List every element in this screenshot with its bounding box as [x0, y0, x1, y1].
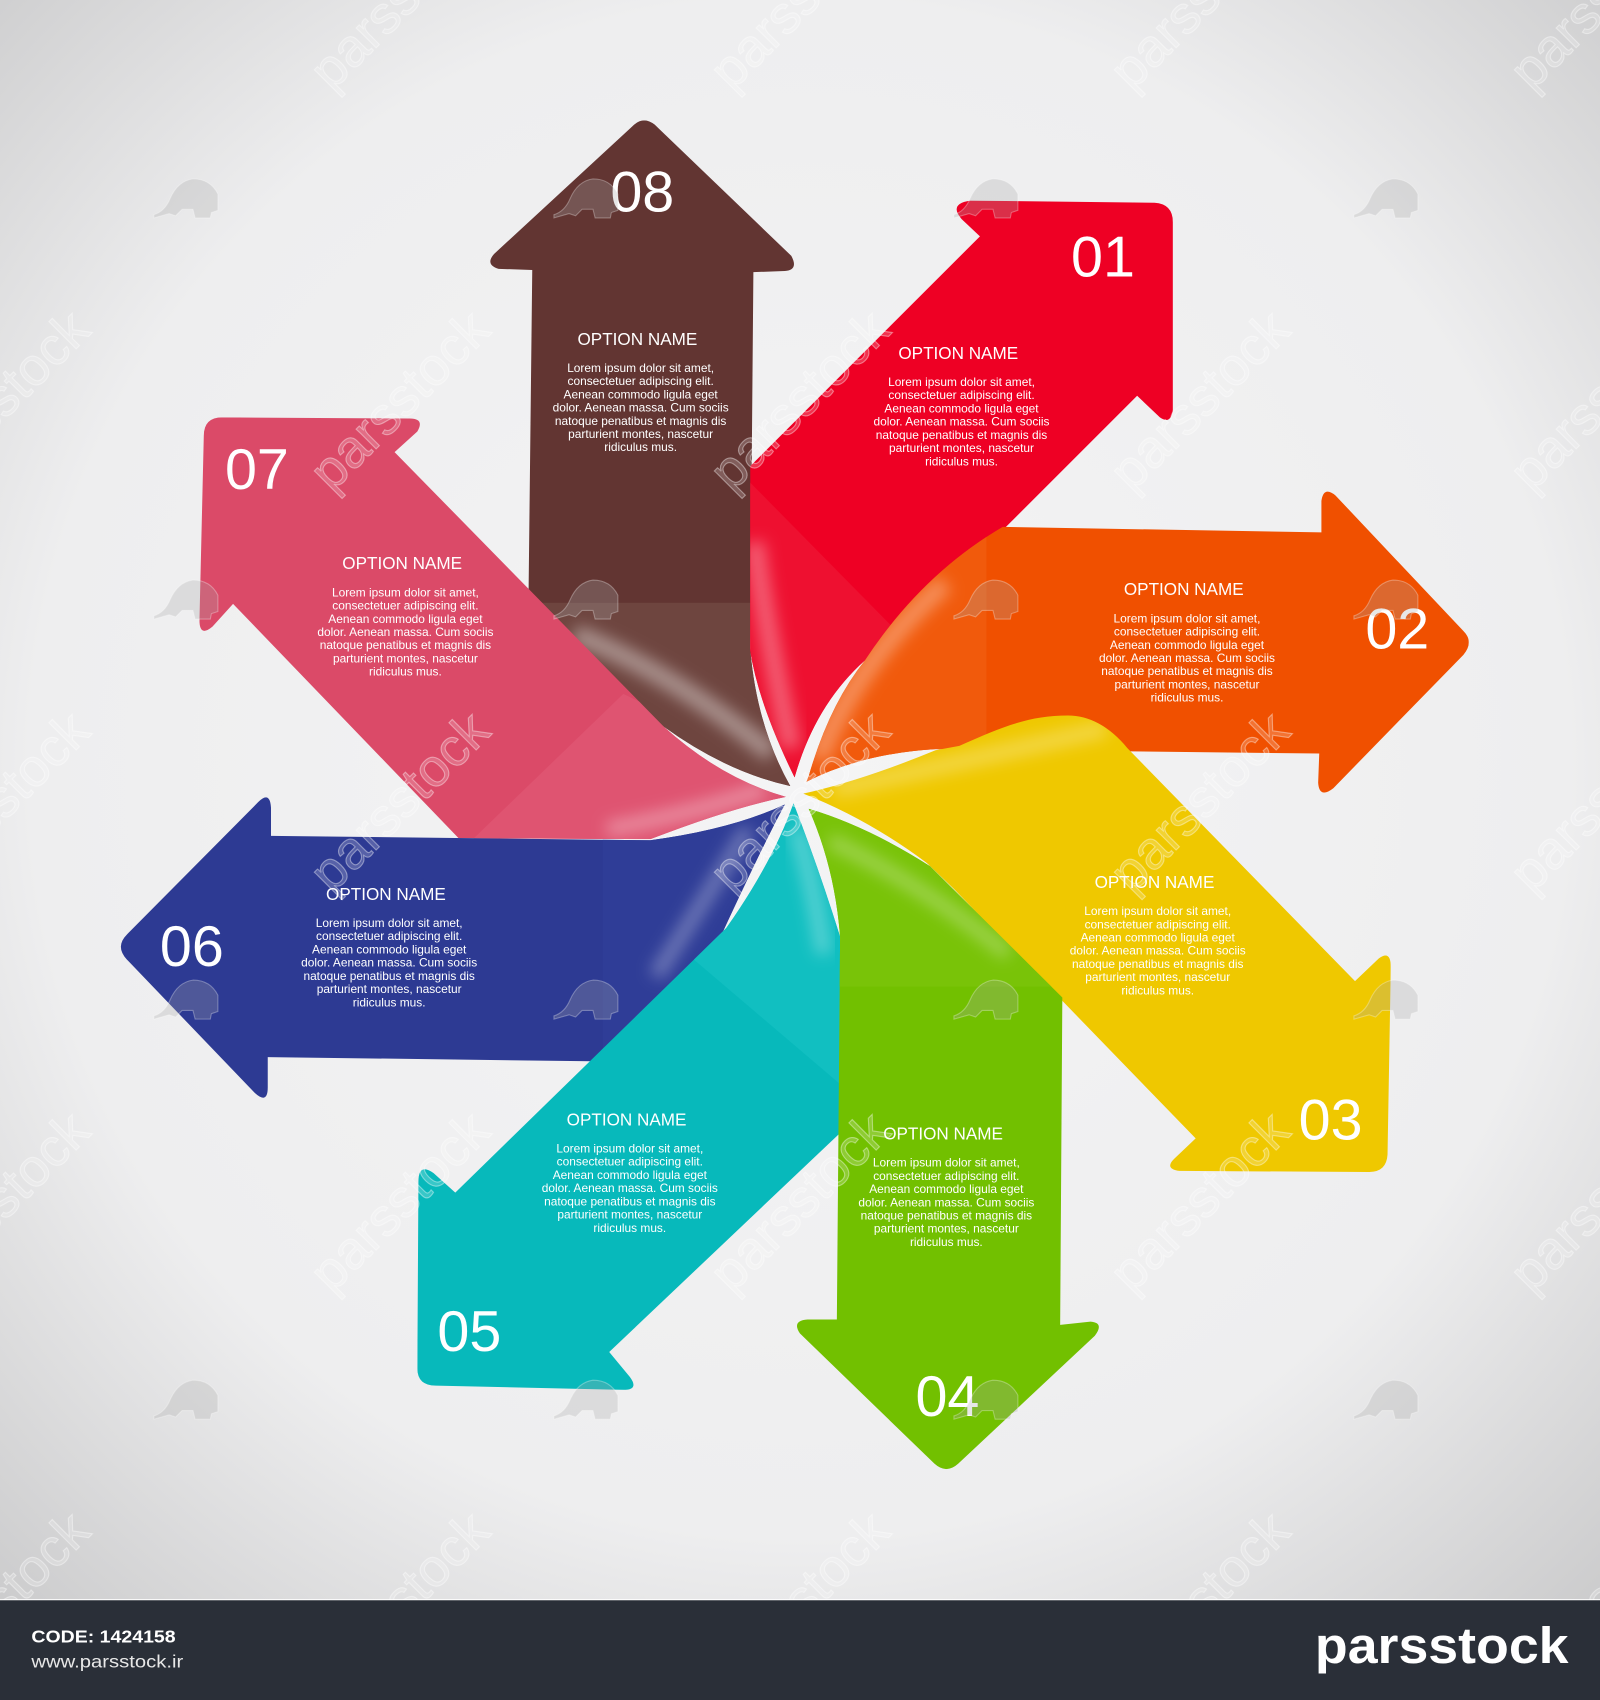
- arrow 05: teal: [407, 791, 856, 1399]
- footer bar: [0, 1599, 1600, 1700]
- text block 07: natoque penatibus et magnis dis: [320, 638, 491, 652]
- text block 03: OPTION NAME: [1095, 873, 1214, 892]
- number 08: 08: [610, 160, 674, 224]
- text block 07: dolor. Aenean massa. Cum sociis: [317, 625, 493, 639]
- text block 04: ridiculus mus.: [910, 1235, 983, 1249]
- footer url: www.parsstock.ir: [30, 1651, 183, 1671]
- text block 07: [317, 554, 493, 679]
- text block 02: parturient montes, nascetur: [1115, 677, 1259, 691]
- text block 05: ridiculus mus.: [593, 1221, 666, 1235]
- watermark overlay: parsstock: [698, 299, 901, 502]
- text block 05: Aenean commodo ligula eget: [553, 1168, 708, 1182]
- text block 01: natoque penatibus et magnis dis: [876, 428, 1047, 442]
- text block 04: Lorem ipsum dolor sit amet,: [873, 1156, 1020, 1170]
- number 05: 05: [437, 1300, 501, 1364]
- number 02: 02: [1365, 597, 1429, 661]
- watermark overlay: parsstock: [298, 1100, 501, 1303]
- watermark overlay: parsstock: [1098, 1500, 1301, 1700]
- text block 01: [874, 344, 1050, 468]
- watermark overlay: parsstock: [1098, 299, 1301, 502]
- text block 03: dolor. Aenean massa. Cum sociis: [1070, 944, 1246, 958]
- text block 04: natoque penatibus et magnis dis: [861, 1208, 1032, 1222]
- text block 06: Aenean commodo ligula eget: [312, 942, 467, 956]
- text block 01: parturient montes, nascetur: [889, 441, 1034, 455]
- text block 06: [301, 885, 477, 1009]
- text block 06: ridiculus mus.: [353, 995, 426, 1009]
- text block 08: parturient montes, nascetur: [568, 427, 713, 441]
- text block 01: Lorem ipsum dolor sit amet,: [888, 375, 1035, 389]
- text block 06: Lorem ipsum dolor sit amet,: [316, 916, 463, 930]
- text block 08: Lorem ipsum dolor sit amet,: [567, 361, 714, 375]
- arrow 02: orange: [806, 492, 1469, 792]
- text block 08: [553, 330, 729, 454]
- watermark overlay: parsstock: [698, 700, 901, 903]
- number 07: 07: [225, 438, 289, 502]
- text block 02: Aenean commodo ligula eget: [1110, 638, 1265, 652]
- text block 05: natoque penatibus et magnis dis: [544, 1194, 716, 1208]
- text block 03: Aenean commodo ligula eget: [1081, 931, 1236, 945]
- text block 08: ridiculus mus.: [604, 440, 677, 454]
- text block 02: [1099, 580, 1275, 705]
- text block 06: OPTION NAME: [326, 885, 446, 904]
- text block 06: dolor. Aenean massa. Cum sociis: [301, 956, 477, 970]
- text block 05: parturient montes, nascetur: [557, 1208, 702, 1222]
- text block 03: ridiculus mus.: [1121, 983, 1194, 997]
- arrow 04: green: [797, 808, 1099, 1470]
- text block 08: natoque penatibus et magnis dis: [555, 414, 726, 428]
- text block 06: natoque penatibus et magnis dis: [303, 969, 475, 983]
- text block 03: Lorem ipsum dolor sit amet,: [1084, 904, 1231, 918]
- text block 03: natoque penatibus et magnis dis: [1072, 957, 1243, 971]
- text block 01: OPTION NAME: [898, 344, 1018, 363]
- text block 06: consectetuer adipiscing elit.: [316, 929, 462, 943]
- footer code: CODE: 1424158: [31, 1627, 176, 1647]
- text block 01: dolor. Aenean massa. Cum sociis: [874, 415, 1050, 429]
- number 04: 04: [915, 1365, 979, 1429]
- number 03: 03: [1299, 1088, 1363, 1152]
- text block 01: Aenean commodo ligula eget: [884, 401, 1039, 415]
- arrow 08: brown: [490, 120, 794, 786]
- text block 02: consectetuer adipiscing elit.: [1114, 625, 1260, 639]
- text block 05: consectetuer adipiscing elit.: [557, 1155, 703, 1169]
- text block 07: parturient montes, nascetur: [333, 651, 478, 665]
- text block 02: dolor. Aenean massa. Cum sociis: [1099, 651, 1275, 665]
- arrow 07: pink: [184, 401, 802, 846]
- watermark overlay: parsstock: [698, 1100, 901, 1303]
- text block 05: OPTION NAME: [567, 1110, 686, 1129]
- watermark overlay: parsstock: [698, 1500, 901, 1700]
- text block 04: Aenean commodo ligula eget: [869, 1182, 1024, 1196]
- text block 02: OPTION NAME: [1124, 580, 1244, 599]
- text block 02: natoque penatibus et magnis dis: [1101, 664, 1273, 678]
- text block 05: Lorem ipsum dolor sit amet,: [556, 1141, 703, 1155]
- text block 08: Aenean commodo ligula eget: [564, 387, 718, 401]
- number 06: 06: [160, 915, 224, 979]
- footer logo: parsstock: [1315, 1617, 1569, 1674]
- text block 03: [1070, 873, 1246, 997]
- text block 05: [542, 1110, 718, 1235]
- watermark overlay: parsstock: [1098, 1100, 1301, 1303]
- text block 07: OPTION NAME: [342, 554, 462, 573]
- watermark overlay: parsstock: [298, 299, 501, 502]
- text block 05: dolor. Aenean massa. Cum sociis: [542, 1181, 718, 1195]
- text block 04: consectetuer adipiscing elit.: [873, 1169, 1019, 1183]
- text block 03: parturient montes, nascetur: [1085, 970, 1230, 984]
- watermark overlay: parsstock: [1098, 700, 1301, 903]
- text block 08: OPTION NAME: [578, 330, 697, 349]
- text block 07: Aenean commodo ligula eget: [328, 612, 483, 626]
- text block 04: [858, 1124, 1034, 1249]
- watermark overlay: parsstock: [298, 1500, 501, 1700]
- text block 01: consectetuer adipiscing elit.: [888, 388, 1035, 402]
- text block 02: Lorem ipsum dolor sit amet,: [1114, 611, 1260, 625]
- text block 08: dolor. Aenean massa. Cum sociis: [553, 401, 729, 415]
- number 01: 01: [1071, 225, 1135, 289]
- arrow 03: yellow: [791, 705, 1398, 1182]
- text block 04: dolor. Aenean massa. Cum sociis: [858, 1195, 1034, 1209]
- arrow 01: red: [750, 200, 1173, 778]
- arrow 06: blue: [120, 797, 785, 1098]
- text block 07: ridiculus mus.: [369, 665, 442, 679]
- text block 07: Lorem ipsum dolor sit amet,: [332, 585, 479, 599]
- watermark overlay: parsstock: [298, 700, 501, 903]
- text block 07: consectetuer adipiscing elit.: [332, 599, 479, 613]
- text block 08: consectetuer adipiscing elit.: [568, 374, 714, 388]
- text block 06: parturient montes, nascetur: [317, 982, 462, 996]
- text block 01: ridiculus mus.: [925, 454, 998, 468]
- text block 04: parturient montes, nascetur: [874, 1222, 1019, 1236]
- text block 02: ridiculus mus.: [1151, 691, 1223, 705]
- text block 03: consectetuer adipiscing elit.: [1085, 917, 1231, 931]
- text block 04: OPTION NAME: [883, 1124, 1003, 1143]
